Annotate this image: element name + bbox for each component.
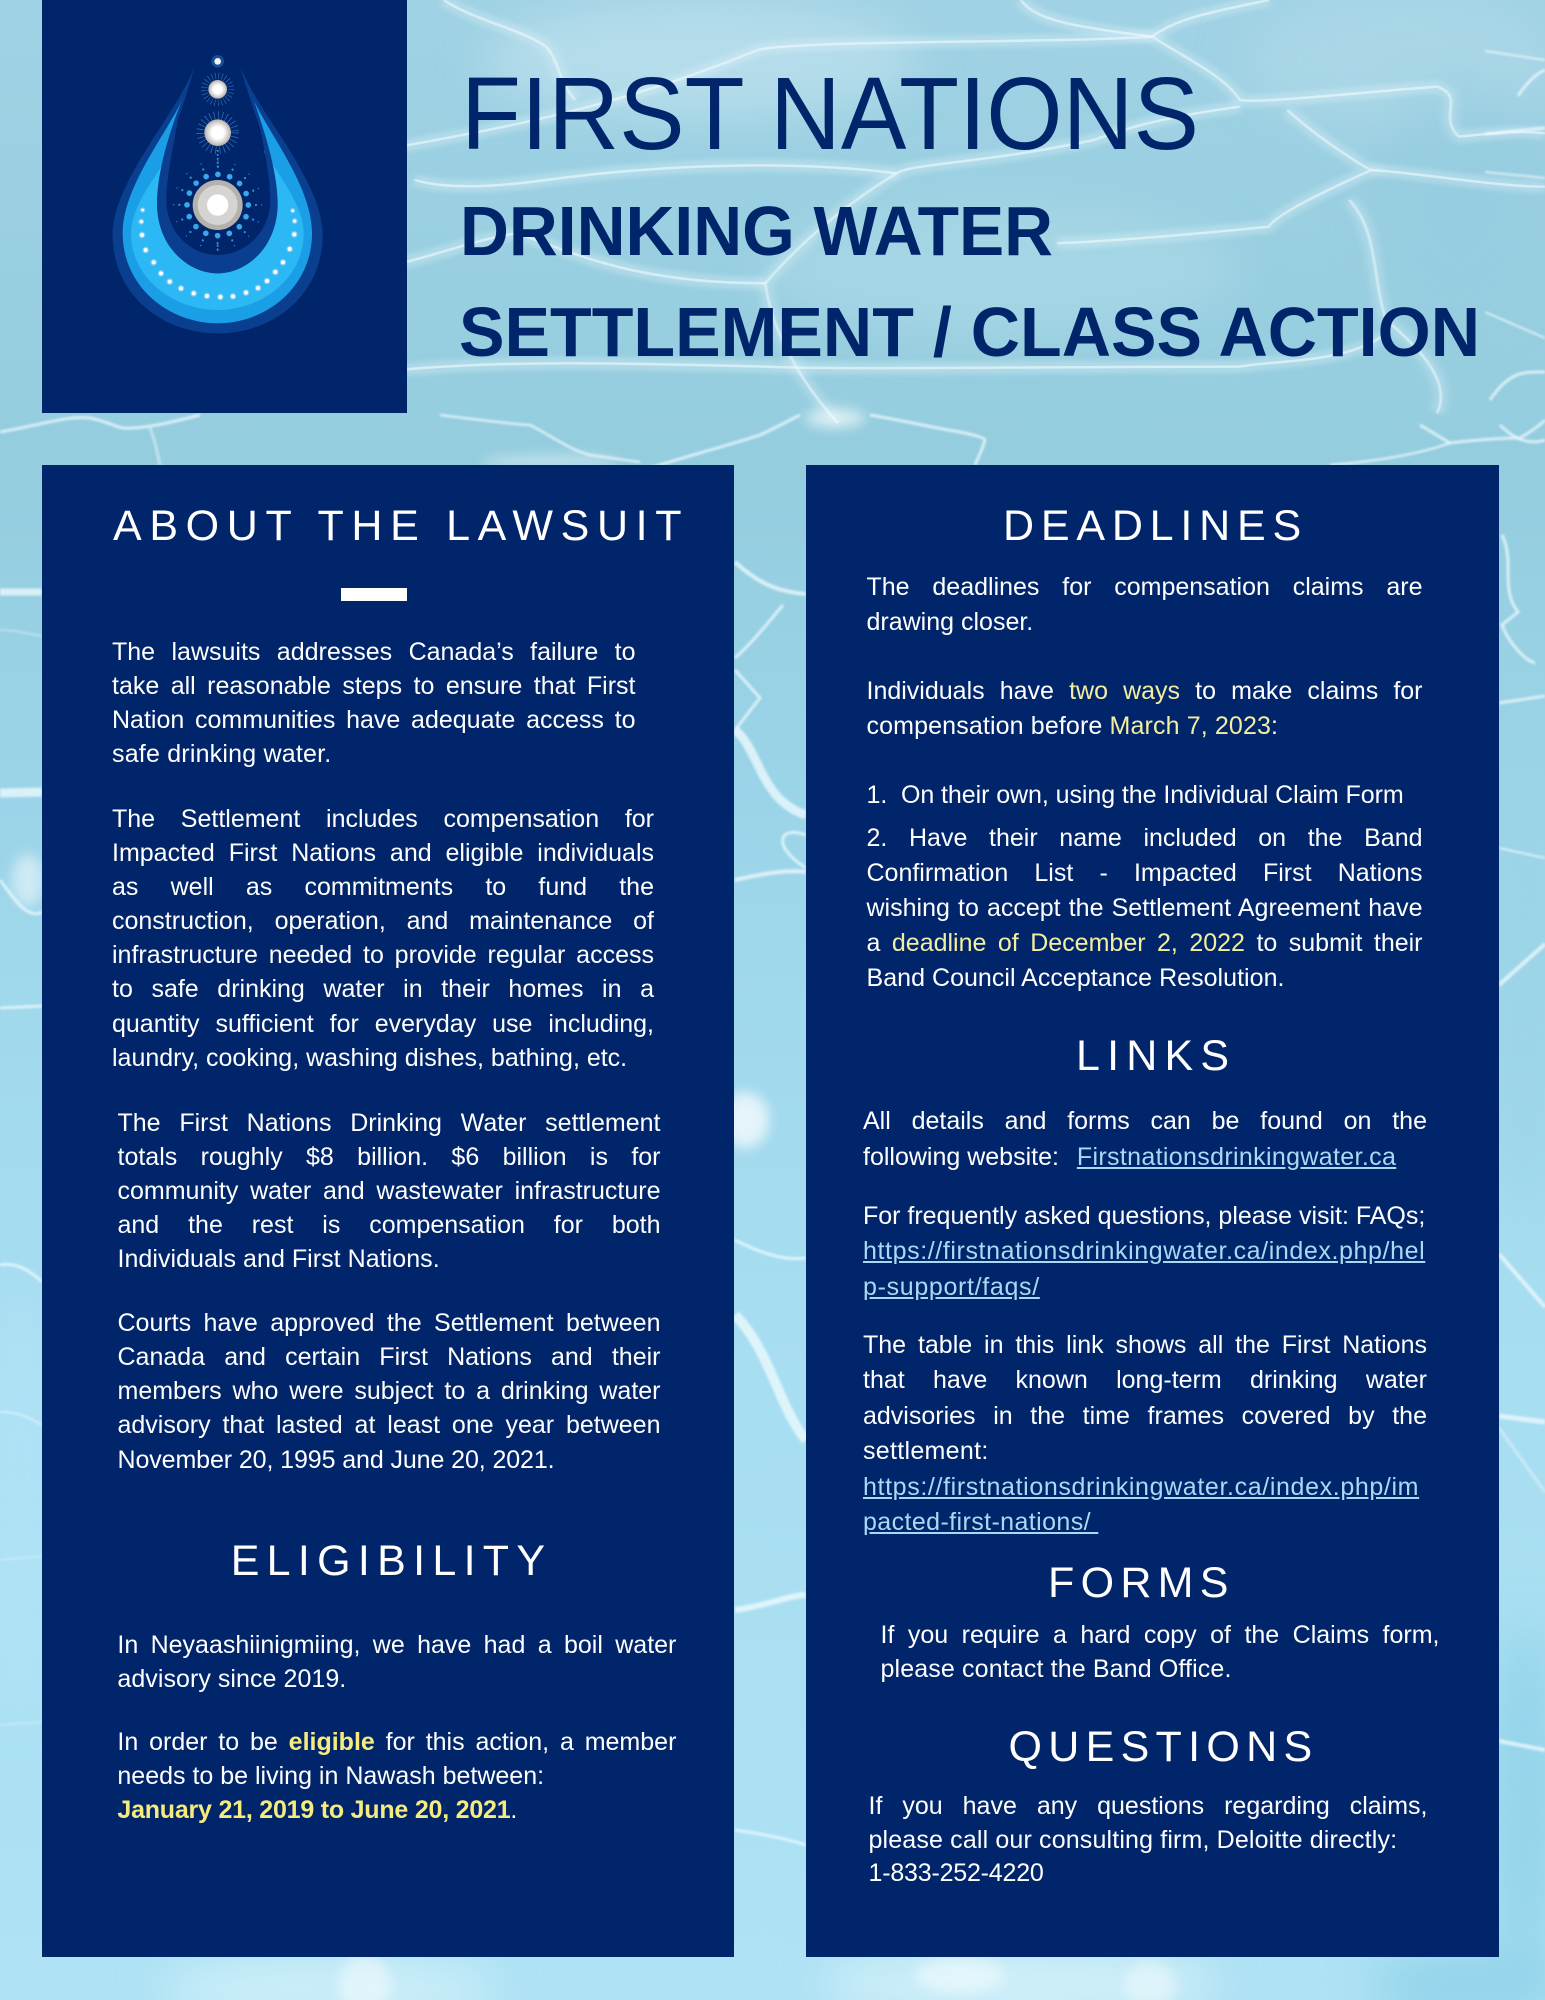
title line: Settlement / Class Action: SETTLEMENT / CLASS ACTION [459,293,1480,371]
text: settlement description: laundry, cooking, washing dishes, bathing, etc. [112,1044,627,1072]
text: impacted nations link: settlement: [863,1437,989,1465]
text: settlement totals: community water and wastewater infrastructure [118,1177,660,1205]
text: impacted nations link: that have known long-term drinking water [863,1366,1427,1394]
heading: eligibility: ELIGIBILITY [231,1537,552,1585]
right strip [1485,51,1545,60]
text: settlement description: as well as commitments to fund the [112,873,654,901]
text: eligibility dates [117,1728,676,1824]
title [459,56,1480,371]
cyan band [123,100,312,323]
text: option two: 2. Have their name included on the Band [866,824,1422,852]
text: option two: Band Council Acceptance Resolution. [866,964,1284,992]
text: FAQ link [863,1202,1426,1301]
heading accent bar [341,588,407,601]
pearls [211,55,224,68]
heading: links: LINKS [1076,1032,1236,1080]
text: boil water advisory [117,1631,676,1693]
text: two ways to claim [866,677,1423,740]
text: lawsuit intro [112,638,636,768]
text: website link: following website: Firstnationsdrinkingwater.ca [863,1143,1396,1171]
text: option two: a deadline of December 2, 2022 to submit their [866,929,1423,957]
text: impacted nations link: pacted-first-nations/ [863,1508,1091,1536]
text: court approval: advisory that lasted at least one year between [118,1411,660,1439]
text: settlement totals: totals roughly $8 billion. $6 billion is for [118,1143,660,1171]
text: website link [863,1107,1427,1171]
text: option two: Confirmation List - Impacted First Nations [866,859,1422,887]
text: settlement description: infrastructure needed to provide regular access [112,941,654,969]
text: eligibility dates: In order to be eligible for this action, a member [117,1728,676,1756]
light cyan band [131,150,304,310]
heading: deadlines: DEADLINES [1003,502,1308,550]
heading: forms: FORMS [1048,1559,1235,1607]
panel: left column [42,465,734,1957]
text: questions [868,1792,1428,1887]
text: settlement description: Impacted First Nations and eligible individuals [112,839,654,867]
text: settlement description: to safe drinking water in their homes in a [112,975,654,1003]
text: impacted nations link: https://firstnationsdrinkingwater.ca/index.php/im [863,1473,1419,1501]
icon: water drop logo [112,55,323,334]
text: impacted nations link: advisories in the time frames covered by the [863,1402,1427,1430]
text: settlement totals [118,1109,660,1273]
text: court approval: members who were subject to a drinking water [118,1377,660,1405]
text: two ways to claim: Individuals have two ways to make claims for [866,677,1423,705]
text: website link: All details and forms can be found on the [863,1107,1427,1135]
text: lawsuit intro: take all reasonable steps to ensure that First [112,672,636,700]
text: option one: 1. On their own, using the Individual Claim Form [866,781,1404,809]
text: deadlines intro: drawing closer. [866,608,1033,636]
text: settlement totals: Individuals and First Nations. [118,1245,440,1273]
text: lawsuit intro: The lawsuits addresses Canada’s failure to [112,638,636,666]
text: lawsuit intro: Nation communities have adequate access to [112,706,636,734]
text: court approval: Courts have approved the Settlement between [118,1309,660,1337]
inner pocket rim [157,100,278,273]
text: FAQ link: p-support/faqs/ [863,1273,1040,1301]
text: settlement description [112,805,654,1072]
band between header and panels [0,415,200,432]
bead chain [139,208,297,300]
text: boil water advisory: In Neyaashiinigmiing, we have had a boil water [117,1631,676,1659]
text: two ways to claim: compensation before March 7, 2023: [866,712,1278,740]
panel: logo [42,0,407,413]
text: settlement description: construction, operation, and maintenance of [112,907,654,935]
text: questions: If you have any questions regarding claims, [868,1792,1428,1820]
panel: right column [806,465,1499,1957]
text: settlement totals: The First Nations Drinking Water settlement [118,1109,660,1137]
heading: about the lawsuit: ABOUT THE LAWSUIT [113,502,689,550]
text: boil water advisory: advisory since 2019. [117,1665,346,1693]
text: settlement description: The Settlement includes compensation for [112,805,654,833]
left strip [0,588,42,596]
text: option two: wishing to accept the Settlement Agreement have [866,894,1422,922]
text: option two [866,824,1423,992]
text: eligibility dates: needs to be living in Nawash between: [117,1762,544,1790]
title line: Drinking Water: DRINKING WATER [460,192,1053,270]
text: court approval: November 20, 1995 and June 20, 2021. [118,1446,555,1474]
text: deadlines intro: The deadlines for compensation claims are [866,573,1422,601]
text: forms: please contact the Band Office. [880,1655,1232,1683]
header caustics [400,0,1545,423]
text: settlement totals: and the rest is compensation for both [118,1211,660,1239]
text: forms: If you require a hard copy of the Claims form, [880,1621,1440,1649]
outer drop band [113,66,323,333]
text: FAQ link: https://firstnationsdrinkingwater.ca/index.php/hel [863,1237,1425,1265]
text: eligibility dates: January 21, 2019 to June 20, 2021. [117,1796,517,1824]
text: settlement description: quantity sufficient for everyday use including, [112,1010,654,1038]
text: questions: 1-833-252-4220 [868,1859,1044,1887]
text: FAQ link: For frequently asked questions, please visit: FAQs; [863,1202,1425,1230]
text: impacted nations link [863,1331,1427,1536]
text: forms [880,1621,1440,1683]
title line: First Nations: FIRST NATIONS [461,56,1199,171]
text: deadlines intro [866,573,1422,636]
text: impacted nations link: The table in this link shows all the First Nations [863,1331,1427,1359]
heading: questions: QUESTIONS [1008,1723,1318,1771]
text: questions: please call our consulting firm, Deloitte directly: [868,1826,1397,1854]
text: lawsuit intro: safe drinking water. [112,740,331,768]
text: court approval: Canada and certain First Nations and their [118,1343,660,1371]
text: court approval [118,1309,660,1474]
